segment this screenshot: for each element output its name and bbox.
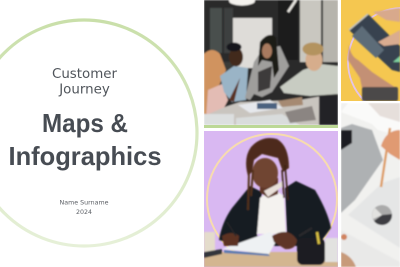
author and year [60, 200, 109, 216]
main title: Infographics [8, 141, 162, 171]
subtitle: Customer [52, 67, 118, 82]
main title [8, 108, 162, 171]
author and year: Name Surname [60, 200, 109, 206]
photo: documents with pie chart [341, 103, 400, 267]
man on right [280, 64, 338, 96]
photo: woman writing on lilac background [204, 131, 338, 267]
red-haired woman [204, 50, 226, 116]
peach ring [207, 134, 337, 264]
subtitle: Journey [58, 82, 110, 98]
table with documents [210, 96, 320, 125]
lilac arc [347, 7, 400, 101]
main title: Maps & [42, 108, 128, 138]
subtitle [52, 67, 118, 98]
man in blue shirt [220, 66, 248, 102]
green strip [204, 125, 338, 128]
decorative ring [0, 20, 197, 246]
standing woman [245, 46, 289, 100]
photo: team meeting [204, 0, 338, 125]
photo: hand holding phone on yellow background [341, 0, 400, 101]
author and year: 2024 [76, 209, 92, 216]
